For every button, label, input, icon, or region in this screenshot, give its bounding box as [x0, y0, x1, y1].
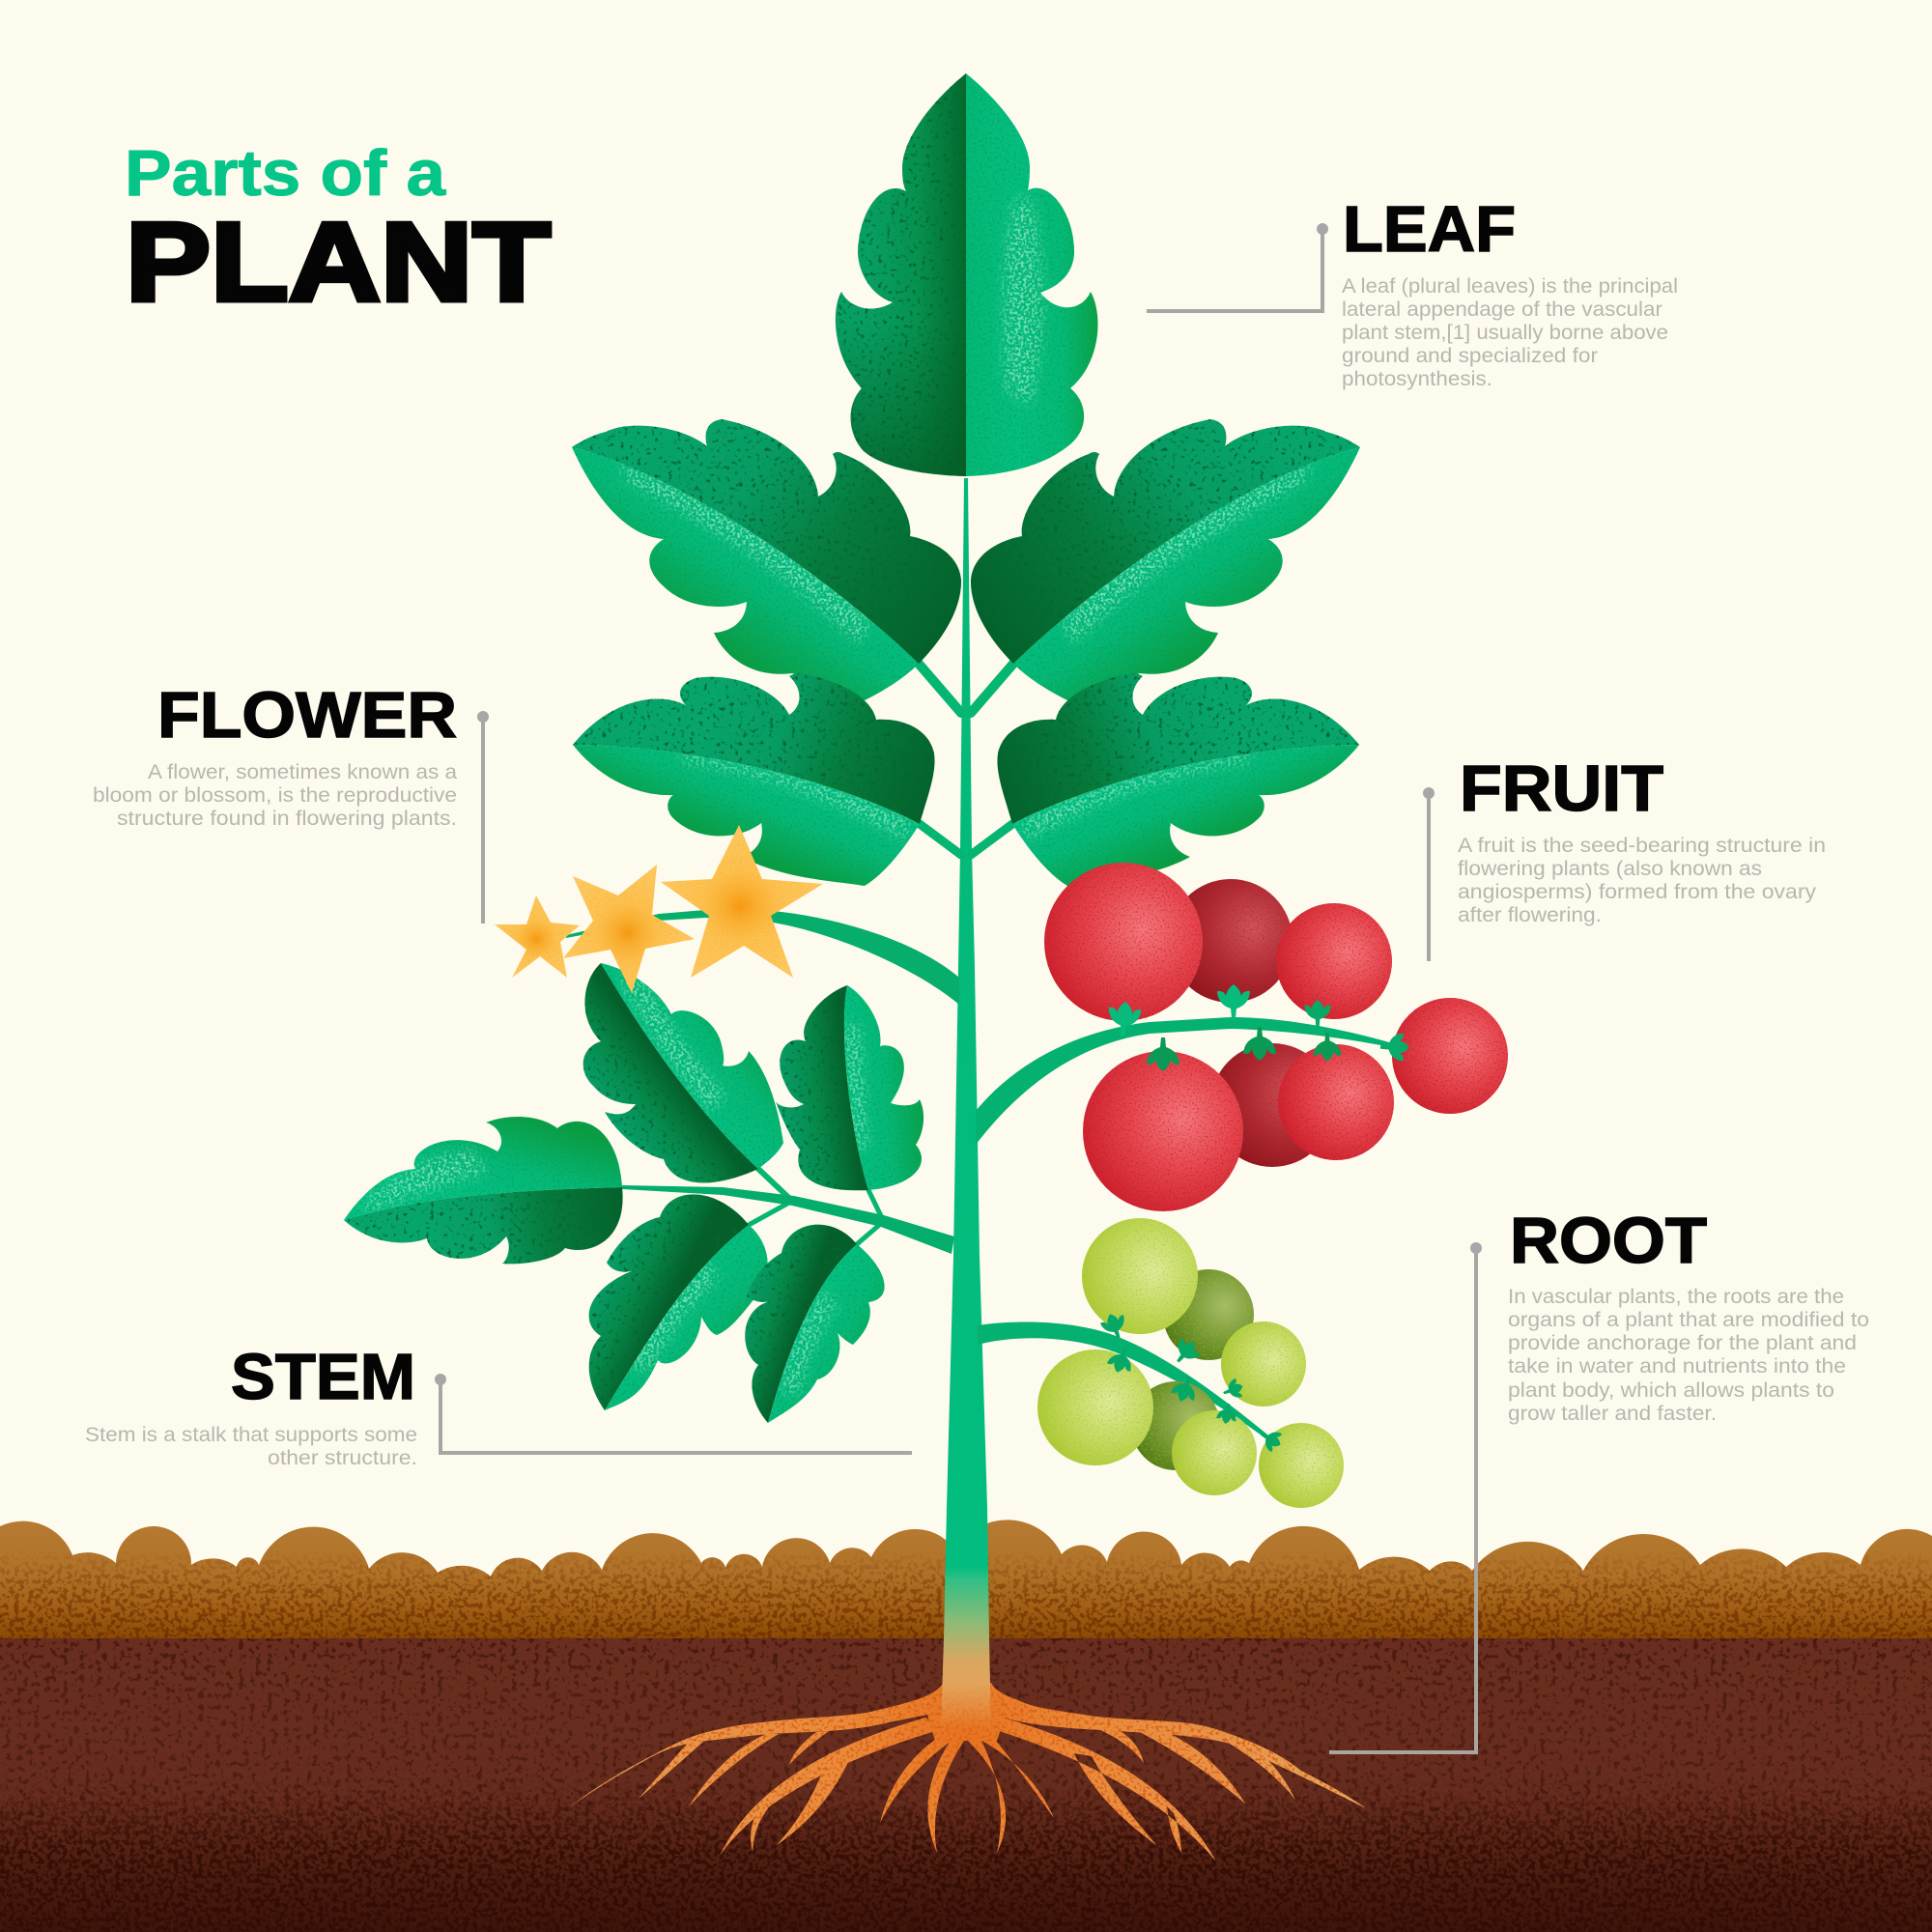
calyxes on green fruit — [1098, 1310, 1286, 1454]
callout: leaf: photosynthesis. — [1342, 368, 1492, 390]
flowers — [495, 825, 823, 993]
callout: root: plant body, which allows plants to — [1508, 1379, 1834, 1402]
callout: root: take in water and nutrients into the — [1508, 1355, 1846, 1378]
callout: root: provide anchorage for the plant and — [1508, 1332, 1857, 1354]
rootlets — [639, 1718, 1295, 1861]
callout: root: grow taller and faster. — [1508, 1403, 1717, 1425]
leaf: lower cluster bottom right — [745, 1225, 885, 1423]
topsoil speckle — [0, 1550, 1932, 1638]
leaf: top leaf — [836, 73, 1098, 476]
callout: fruit — [1423, 753, 1826, 961]
callout: flower: bloom or blossom, is the reproductive — [93, 784, 457, 807]
fruit: red tomatoes — [1044, 863, 1508, 1211]
title — [125, 137, 551, 325]
leader line: flower — [481, 719, 485, 923]
red fruit branch — [976, 1017, 1396, 1145]
topsoil band — [0, 1520, 1932, 1638]
callout: leaf: ground and specialized for — [1342, 345, 1598, 367]
callout: root: ROOT — [1510, 1205, 1707, 1277]
leaf: lower cluster upper right — [776, 985, 923, 1190]
callout: root — [1329, 1205, 1869, 1752]
leaf: middle left — [573, 673, 935, 886]
green fruit branch — [978, 1321, 1273, 1441]
leader line: root — [1329, 1250, 1476, 1752]
leader line: fruit — [1427, 795, 1431, 961]
leaf: upper right — [971, 419, 1360, 700]
callout: fruit: FRUIT — [1460, 753, 1663, 825]
callout: stem — [85, 1341, 912, 1469]
leaf: middle right — [997, 673, 1359, 886]
callout: fruit: A fruit is the seed-bearing structure in — [1458, 835, 1826, 857]
light green fruit front — [1082, 1218, 1198, 1334]
callout: root: organs of a plant that are modified to — [1508, 1309, 1869, 1331]
leaf twigs — [749, 664, 1013, 1244]
main stem — [941, 478, 991, 1729]
flower branch — [566, 910, 959, 1005]
deep subsoil speckle — [0, 1777, 1932, 1932]
leaf cluster branch — [622, 1185, 954, 1254]
dark green fruit behind — [1163, 1269, 1254, 1360]
flower: small — [495, 895, 580, 978]
callout: fruit: flowering plants (also known as — [1458, 858, 1762, 880]
callout: leaf: LEAF — [1343, 193, 1516, 266]
subsoil band — [0, 1638, 1932, 1932]
callout: flower: FLOWER — [157, 679, 457, 752]
soil: topsoil and subsoil layers — [0, 1520, 1932, 1932]
calyxes on red fruit — [1106, 984, 1409, 1071]
stem and branches — [566, 478, 1396, 1729]
callout: leaf — [1147, 193, 1678, 390]
leaf: lower cluster far left — [344, 1117, 623, 1264]
callout: flower: structure found in flowering plants. — [117, 808, 457, 830]
callout: fruit: after flowering. — [1458, 904, 1602, 926]
subsoil speckle — [0, 1638, 1932, 1932]
callout: flower — [93, 679, 489, 923]
title line: Parts of a: Parts of a — [125, 137, 446, 210]
callout: leaf: A leaf (plural leaves) is the principal — [1342, 275, 1678, 298]
dark tomatoes behind — [1169, 879, 1293, 1003]
leader line: leaf — [1147, 230, 1322, 311]
leader line: stem — [440, 1381, 912, 1453]
roots — [567, 1683, 1366, 1861]
leaf: lower cluster upper left — [583, 963, 783, 1182]
callout: leaf: plant stem,[1] usually borne above — [1342, 322, 1668, 344]
fruit: green tomatoes — [1037, 1218, 1344, 1508]
callout: flower: A flower, sometimes known as a — [148, 761, 457, 783]
callout: stem: other structure. — [268, 1447, 417, 1469]
light tomatoes front — [1044, 863, 1203, 1021]
callout: stem: Stem is a stalk that supports some — [85, 1424, 417, 1446]
leaf: upper left — [572, 419, 961, 700]
leaf: lower cluster bottom left — [589, 1194, 768, 1410]
main root flare — [567, 1683, 1366, 1809]
flower: large — [661, 825, 823, 978]
callout: fruit: angiosperms) formed from the ovary — [1458, 881, 1817, 903]
callout: stem: STEM — [231, 1341, 415, 1413]
callout: root: In vascular plants, the roots are the — [1508, 1286, 1844, 1308]
title line: PLANT: PLANT — [126, 199, 551, 325]
callout: leaf: lateral appendage of the vascular — [1342, 298, 1662, 321]
flower: medium — [563, 865, 695, 993]
